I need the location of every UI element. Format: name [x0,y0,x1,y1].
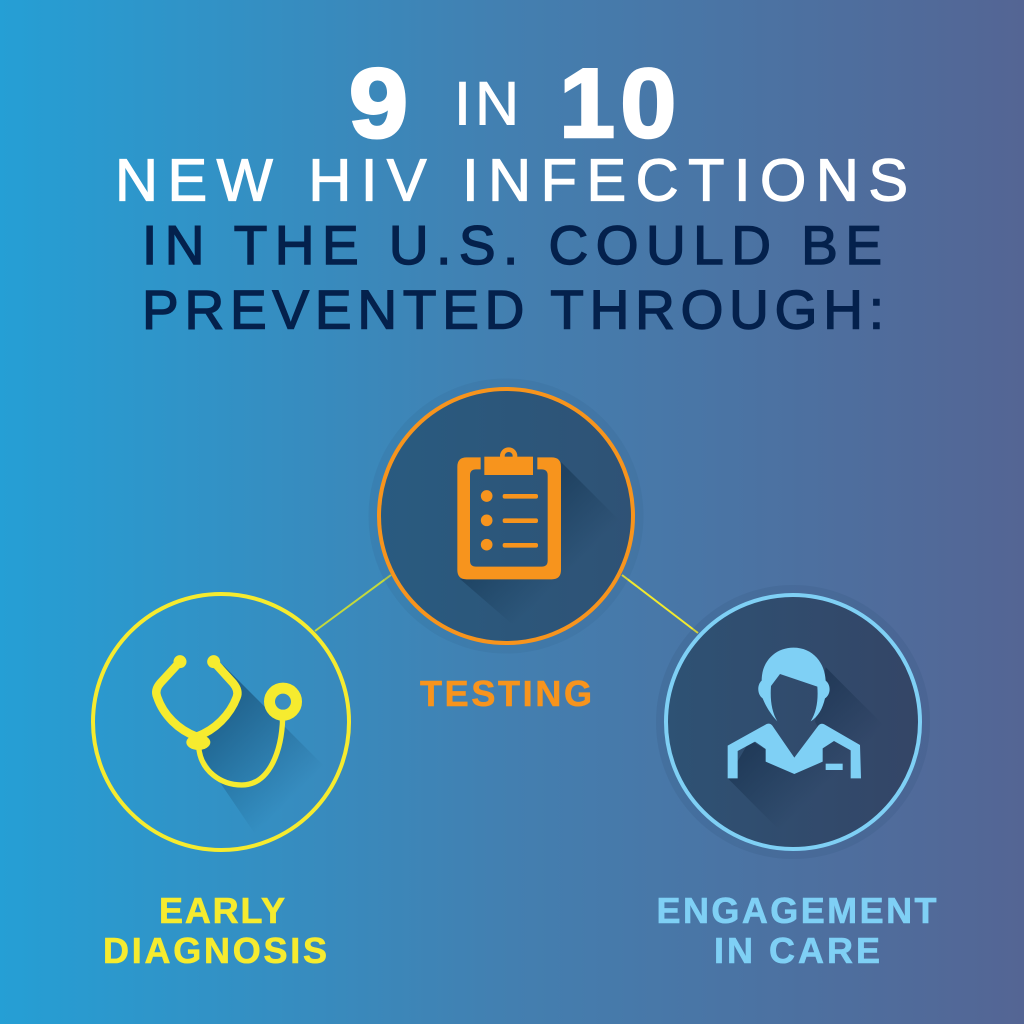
icon: doctor [728,648,861,778]
headline line 2: IN THE U.S. COULD BE [142,214,882,276]
testing circle halo [368,378,644,654]
testing label: TESTING [420,673,592,714]
label line: engagement: ENGAGEMENT [656,890,936,931]
engagement circle [666,595,920,849]
title word in: IN [454,70,519,138]
stethoscope shadow [202,664,310,820]
panel: engagement in care [656,585,936,971]
engagement circle halo [656,585,930,859]
headline line 3: PREVENTED THROUGH: [142,279,884,341]
label line: early: EARLY [159,890,285,931]
testing icon shadow [460,462,600,610]
engagement label [656,890,936,971]
title number 10: 10 [559,49,682,159]
panel: testing [370,387,635,706]
early diagnosis circle [93,594,349,850]
label line: in care: IN CARE [714,930,880,971]
icon: clipboard [457,450,561,579]
title number 9: 9 [349,48,408,158]
icon: stethoscope [156,655,296,785]
panel: early diagnosis [93,594,349,971]
label line: diagnosis: DIAGNOSIS [103,930,327,971]
connector: testing to engagement in care [622,575,698,633]
connector: testing to early diagnosis [315,575,391,631]
headline line 1: NEW HIV INFECTIONS [115,147,908,214]
early diagnosis label [103,890,327,971]
doctor icon shadow [728,668,858,808]
testing circle [379,389,633,643]
title [115,48,908,341]
